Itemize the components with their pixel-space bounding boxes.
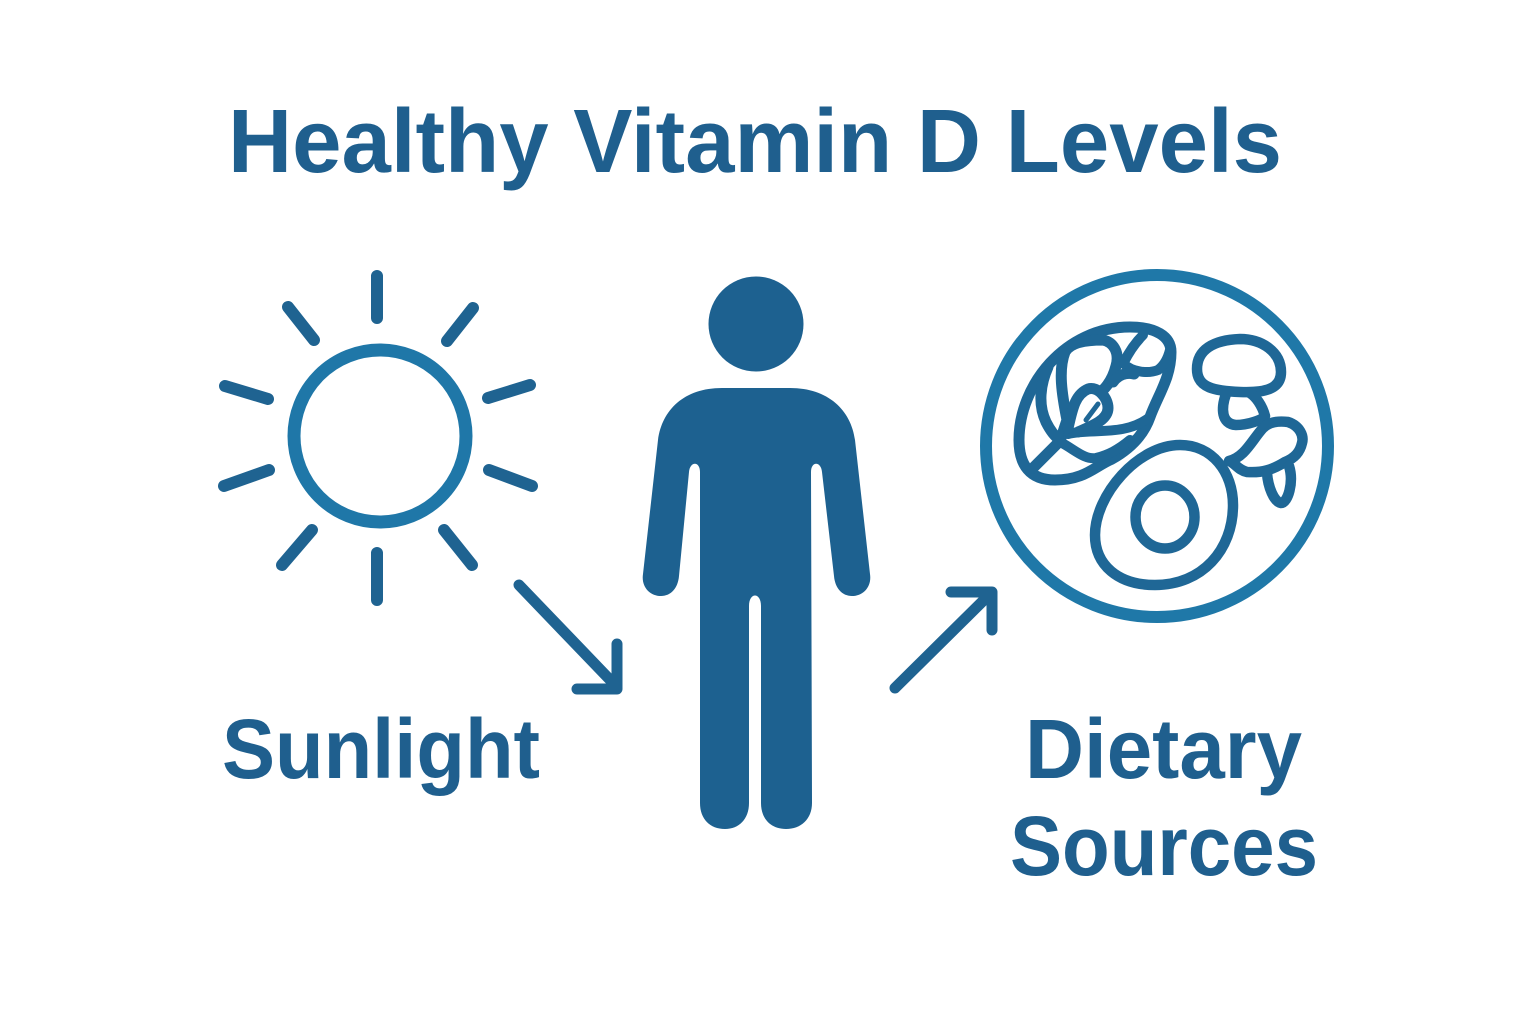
arrow: dietary sources to person bbox=[895, 592, 992, 688]
label: dietary sources: Sources bbox=[1010, 799, 1318, 893]
icon: sun bbox=[224, 276, 532, 600]
plate rim bbox=[986, 275, 1328, 617]
title: Healthy Vitamin D Levels bbox=[228, 92, 1282, 192]
egg bbox=[1095, 445, 1233, 585]
leaf bbox=[1019, 327, 1171, 480]
mushrooms bbox=[1197, 339, 1302, 503]
icon: plate of foods bbox=[986, 275, 1328, 617]
icon: person bbox=[643, 276, 870, 829]
label: sunlight: Sunlight bbox=[222, 702, 540, 796]
label: dietary sources bbox=[1010, 702, 1318, 893]
arrow: sunlight to person bbox=[519, 585, 617, 689]
label: dietary sources: Dietary bbox=[1025, 702, 1302, 796]
